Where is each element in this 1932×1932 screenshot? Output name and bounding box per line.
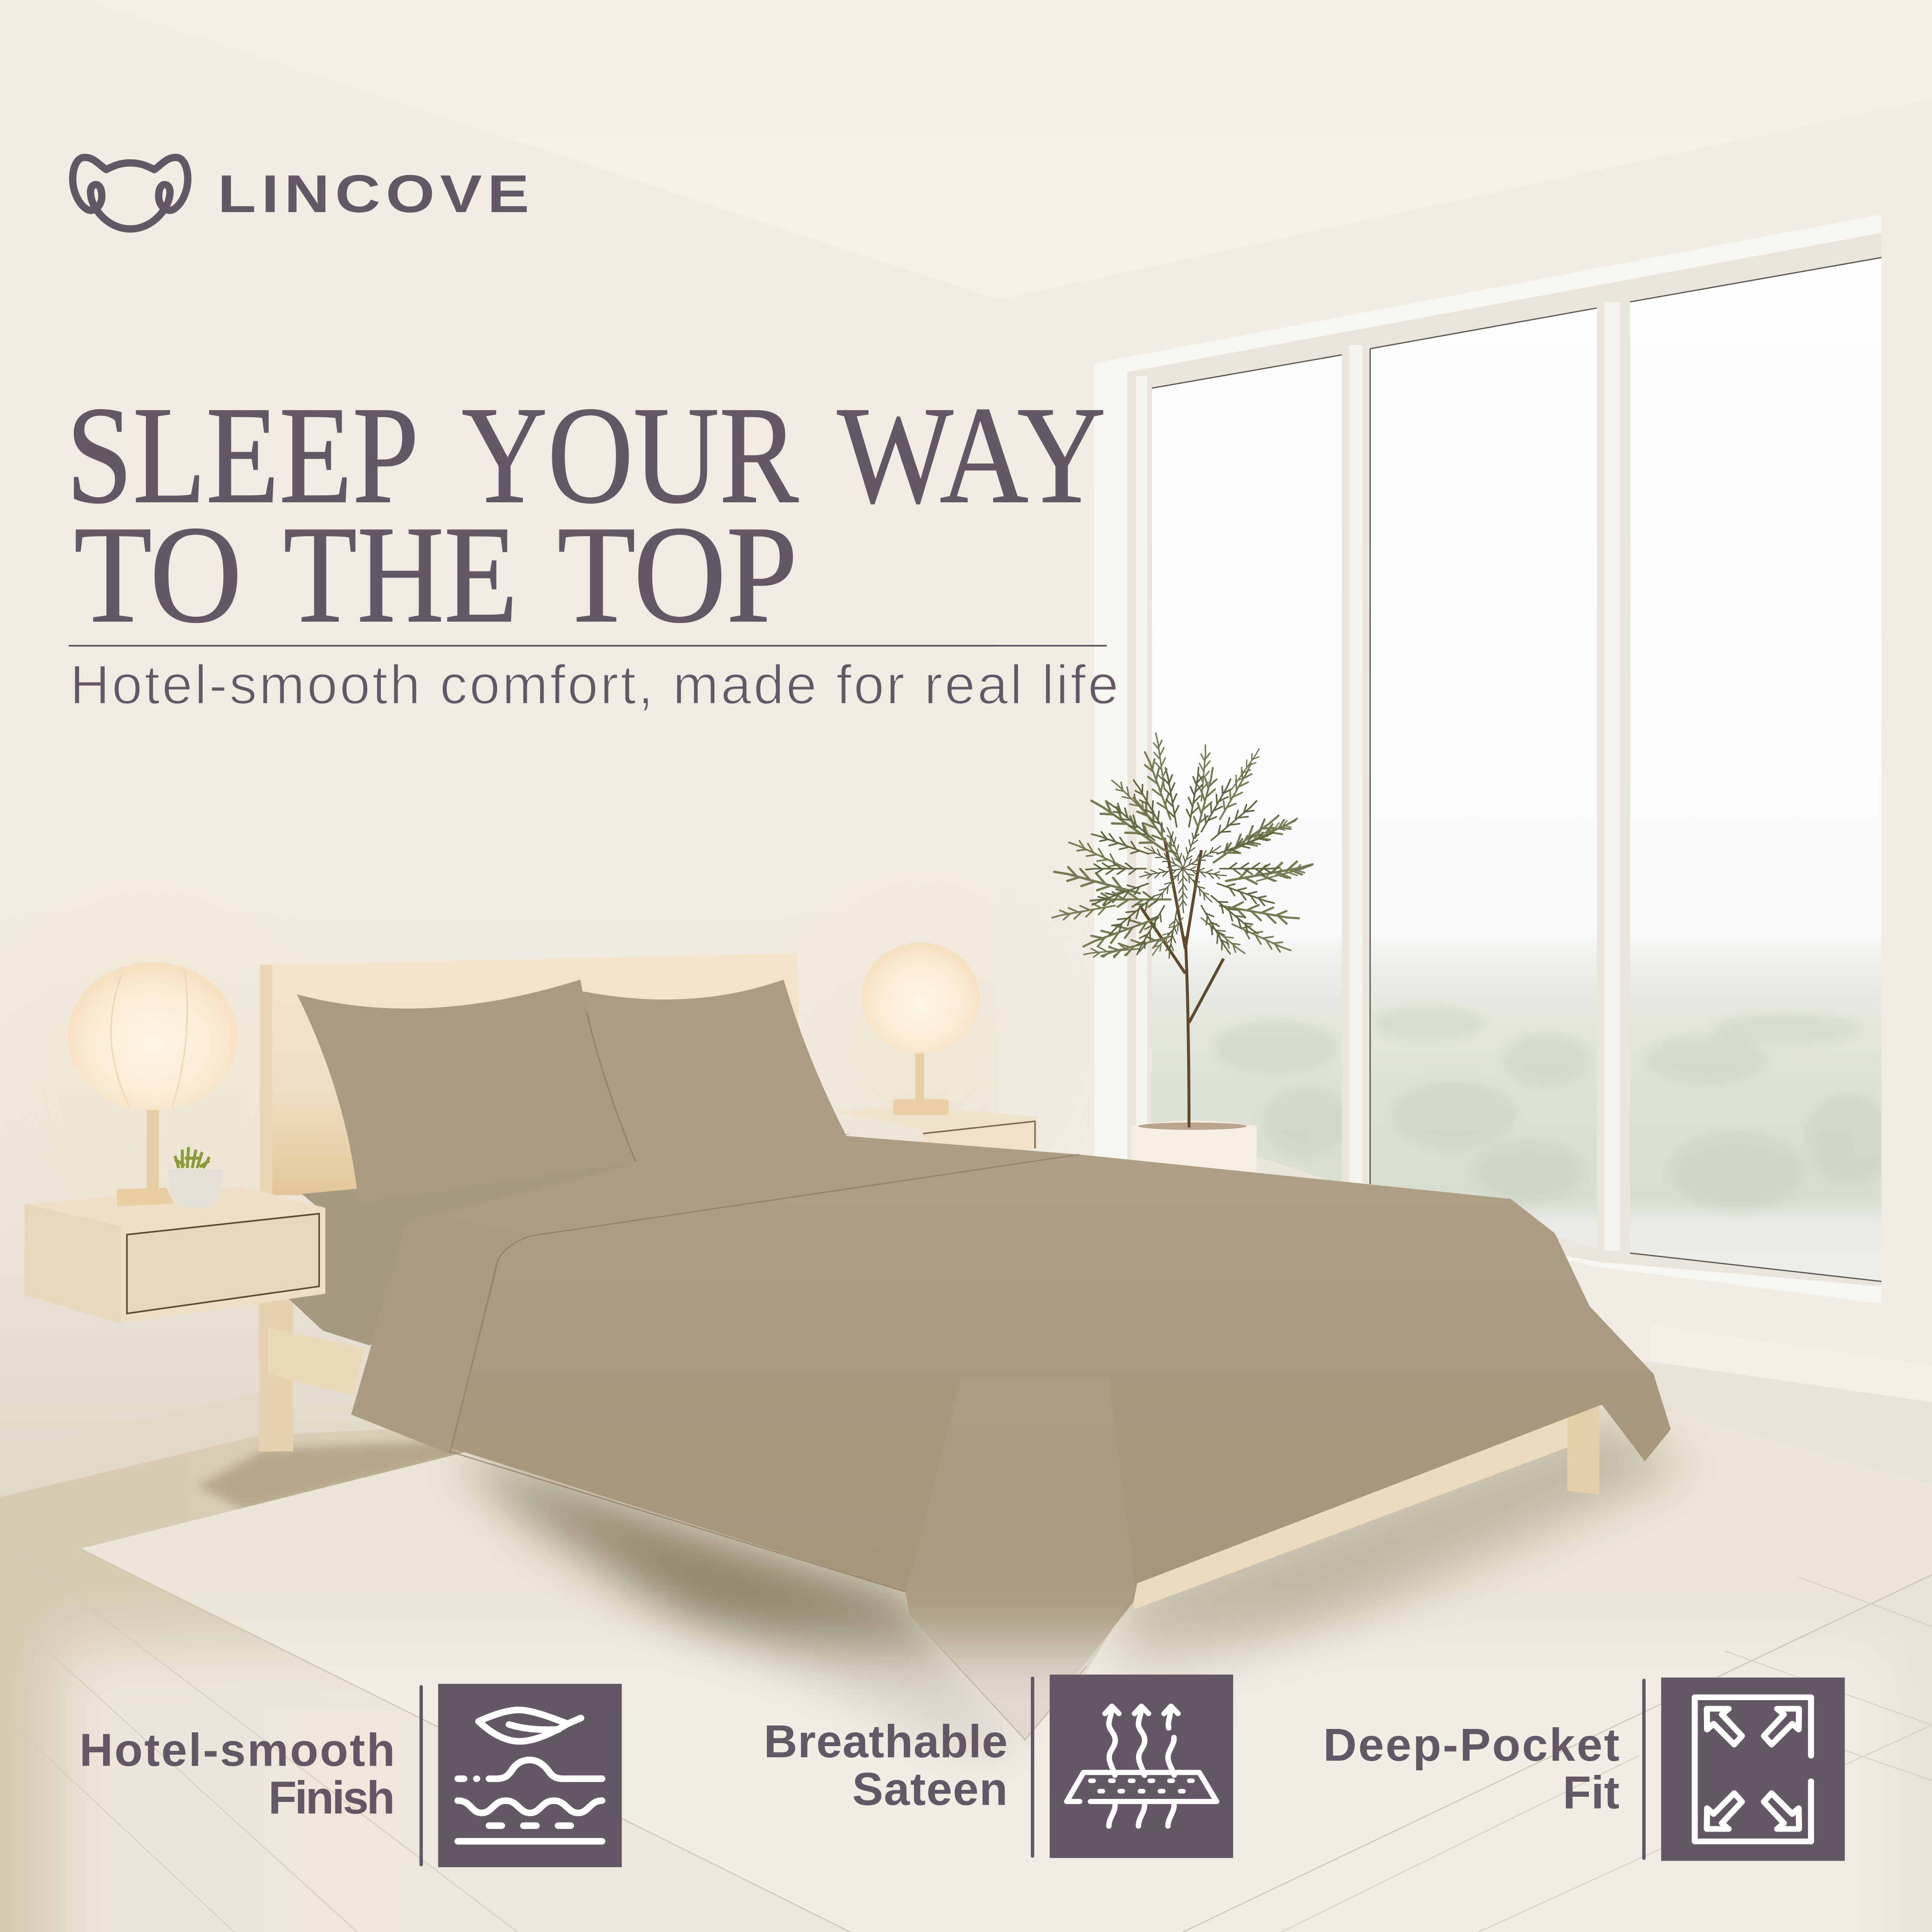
feature: Breathable Sateen [764, 1674, 1233, 1858]
right nightstand [833, 1106, 1037, 1164]
logo [73, 158, 529, 229]
stem [915, 1047, 924, 1102]
shade ribs [111, 971, 187, 1106]
icon: leaf over fabric layers [438, 1684, 622, 1867]
ceiling [0, 0, 1932, 299]
drape shading [905, 1380, 1136, 1740]
right wall [998, 99, 1932, 1405]
headline line 2: TOP [557, 497, 798, 652]
headline line 2: THE [283, 497, 518, 652]
pane 1 [1152, 355, 1342, 1184]
drape tip outline [909, 1614, 1087, 1740]
logo mark: elephant head [73, 158, 188, 229]
drawer [127, 1214, 319, 1313]
trunk [1140, 838, 1224, 1127]
feature: Hotel-smooth Finish [79, 1684, 622, 1867]
drawer line [923, 1121, 1035, 1148]
succulent [175, 1147, 210, 1168]
right wall baseboard [1651, 1324, 1932, 1402]
bed frame left leg [259, 1300, 293, 1452]
headboard [260, 953, 801, 1195]
label: Deep-Pocket [1323, 1719, 1619, 1771]
rug [80, 1392, 1932, 1932]
window frame inner light strips [1136, 302, 1620, 1251]
divider bar [1031, 1677, 1034, 1858]
lamp base [117, 1188, 174, 1206]
floor [0, 1361, 1932, 1932]
bed frame left rail [269, 1328, 365, 1396]
bed [259, 953, 1671, 1747]
subtitle: Hotel-smooth comfort, made for real life [70, 654, 1118, 716]
floor plank and rug edge lines [0, 1540, 1932, 1932]
label: Finish [268, 1771, 395, 1823]
label: Sateen [852, 1763, 1008, 1815]
dark floor under bed head [197, 1439, 474, 1510]
pane 2 [1370, 308, 1597, 1248]
icon: expanding fitted sheet [1661, 1677, 1845, 1861]
window frame band [1127, 233, 1881, 1286]
bottom soft light patch [133, 1717, 1820, 1932]
headline line 1: YOUR [462, 378, 799, 532]
logo wordmark: LINCOVE [218, 164, 529, 224]
pane 3 [1630, 258, 1881, 1282]
lamp shade [68, 962, 238, 1110]
distant trees through window [1214, 1005, 1891, 1210]
feature: Deep-Pocket Fit [1323, 1677, 1845, 1861]
label: Hotel-smooth [79, 1724, 395, 1776]
shadow under bed left [456, 1452, 1029, 1756]
left sheet drape [351, 1214, 531, 1454]
divider bar [419, 1685, 423, 1866]
headline line 2 [74, 497, 798, 652]
window recess and frame [1094, 214, 1881, 1303]
label [1323, 1719, 1619, 1818]
pot [1131, 1121, 1257, 1177]
headline line 2: TO [74, 497, 242, 652]
shadow under bed right [1109, 1417, 1688, 1725]
small potted plant [167, 1147, 223, 1208]
label [764, 1715, 1008, 1815]
right lamp [861, 942, 980, 1115]
outer leafy sprays [1051, 732, 1314, 962]
inner dense leafy sprays [1086, 767, 1280, 959]
pillow divider line [586, 1012, 636, 1162]
bed frame right leg [1567, 1405, 1599, 1495]
bed frame side rail [1127, 1398, 1599, 1609]
left wall [0, 0, 998, 1497]
left wall baseboard [0, 1392, 259, 1497]
icon: breathable fabric with airflow [1050, 1674, 1233, 1858]
olive tree in pot [1051, 732, 1314, 1177]
nightstand front [121, 1208, 325, 1323]
headline divider rule [69, 645, 1107, 647]
front [923, 1116, 1037, 1164]
fitted sheet [286, 1133, 850, 1346]
headline line 1: WAY [837, 378, 1106, 532]
nightstand side [24, 1204, 121, 1323]
headline line 1 [66, 378, 1106, 532]
lamp stem [147, 1106, 159, 1190]
shade [861, 942, 980, 1054]
label: Fit [1563, 1766, 1619, 1818]
headboard edge [260, 965, 272, 1195]
nightstand top [24, 1187, 324, 1226]
pot [167, 1170, 223, 1208]
divider bar [1642, 1679, 1646, 1860]
headline [66, 378, 1106, 652]
headline line 1: SLEEP [66, 378, 419, 532]
base [893, 1099, 949, 1115]
right pillow [579, 980, 847, 1166]
duvet main [431, 1154, 1671, 1740]
top [833, 1106, 1037, 1130]
duvet edge line [450, 1154, 1079, 1592]
bed frame front post [1010, 1688, 1033, 1747]
left lamp [68, 962, 238, 1206]
window pane top shadow lines [1152, 258, 1881, 1282]
soil [1139, 1122, 1247, 1130]
top sheet turn-down [405, 1136, 1079, 1261]
window [1094, 214, 1891, 1303]
left floating nightstand [24, 1187, 325, 1323]
label: Breathable [764, 1715, 1008, 1767]
label [79, 1724, 395, 1823]
left pillow [297, 980, 636, 1203]
lamp glow on wall [17, 899, 1029, 1232]
window panes [1152, 258, 1881, 1282]
